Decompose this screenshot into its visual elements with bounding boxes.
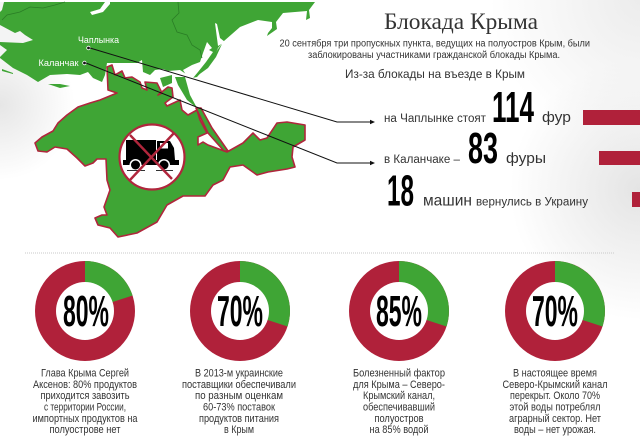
- stat: returned 18: машин: [423, 192, 472, 210]
- caption: Болезненный фактор: [353, 368, 445, 380]
- stat: returned 18: 18: [387, 166, 414, 216]
- stat: Chaplynka 114: фур: [542, 109, 571, 126]
- small islands: [2, 69, 197, 108]
- caption: приходится завозить: [40, 390, 130, 402]
- truck: [123, 140, 179, 171]
- caption: в Крым: [224, 424, 254, 436]
- caption: [32, 368, 138, 436]
- caption: [353, 368, 445, 436]
- stat: Kalanchak 83: в Каланчаке –: [384, 154, 461, 166]
- donut panel: 70% supplies: 70%: [217, 287, 263, 336]
- caption: аграрный сектор. Нет: [509, 413, 601, 425]
- caption: В 2013-м украинские: [195, 368, 283, 380]
- Arabat spit: [196, 108, 228, 151]
- stat: returned 18: вернулись в Украину: [476, 196, 588, 208]
- bar: 18: [632, 192, 640, 207]
- donut panel: 85%: 85%: [376, 287, 422, 336]
- map labels: Чаплынка: [78, 35, 120, 46]
- intro text: 20 сентября три пропускных пункта, ведущих на полуостров Крым, были: [280, 38, 590, 50]
- caption: перекрыт. Около 70%: [510, 390, 600, 402]
- caption: В настоящее время: [513, 368, 597, 380]
- caption: импортных продуктов на: [32, 413, 138, 425]
- caption: на 85% водой: [370, 424, 428, 436]
- intro text: [280, 38, 590, 61]
- mainland: [0, 1, 315, 82]
- donut panel: 80%: 80%: [63, 287, 109, 336]
- stat: Chaplynka 114: [384, 83, 571, 132]
- caption: полуостров: [374, 413, 424, 425]
- caption: продуктов питания: [199, 413, 279, 425]
- arrow: Chaplynka: [87, 46, 375, 124]
- caption: полуострове нет: [50, 424, 120, 436]
- caption: этой воды потреблял: [510, 402, 600, 414]
- intro text: заблокированы участниками гражданской блокады Крыма.: [308, 49, 560, 61]
- map labels: [38, 35, 120, 69]
- stat: returned 18: [387, 166, 588, 216]
- icon: no trucks sign: [120, 124, 184, 190]
- caption: с территории России,: [44, 402, 126, 414]
- stat: Chaplynka 114: 114: [492, 83, 534, 132]
- bar: 114: [583, 110, 640, 125]
- caption: Крымский канал,: [363, 390, 435, 402]
- caption: Глава Крыма Сергей: [41, 368, 129, 380]
- map of Crimea and surrounding mainland: [0, 1, 315, 237]
- caption: по разным оценкам: [195, 390, 283, 402]
- Crimea peninsula: [35, 65, 305, 237]
- donut panel: 80%: [32, 261, 138, 436]
- stat: Kalanchak 83: 83: [468, 124, 498, 173]
- subheading: Из-за блокады на въезде в Крым: [345, 67, 525, 81]
- donut panel: 70% water: 70%: [532, 287, 578, 336]
- caption: воды – нет урожая.: [514, 424, 596, 436]
- donut panel: 70% water: [502, 261, 608, 436]
- arrow: Kalanchak: [83, 61, 375, 165]
- caption: [182, 368, 296, 436]
- caption: для Крыма – Северо-: [353, 379, 445, 391]
- caption: Северо-Крымский канал: [502, 379, 608, 391]
- caption: поставщики обеспечивали: [182, 379, 296, 391]
- caption: Аксенов: 80% продуктов: [33, 379, 137, 391]
- caption: 60-73% поставок: [203, 402, 275, 414]
- caption: обеспечивавший: [363, 402, 435, 414]
- bar: 83: [599, 151, 640, 165]
- caption: [502, 368, 608, 436]
- donut panel: 70% supplies: [182, 261, 296, 436]
- stat: Kalanchak 83: [384, 124, 546, 173]
- stat: Chaplynka 114: на Чаплынке стоят: [384, 113, 487, 125]
- map labels: Каланчак: [38, 58, 79, 69]
- donut panel: 85%: [349, 261, 449, 436]
- title: Блокада Крыма: [384, 9, 538, 34]
- stat: Kalanchak 83: фуры: [506, 150, 546, 167]
